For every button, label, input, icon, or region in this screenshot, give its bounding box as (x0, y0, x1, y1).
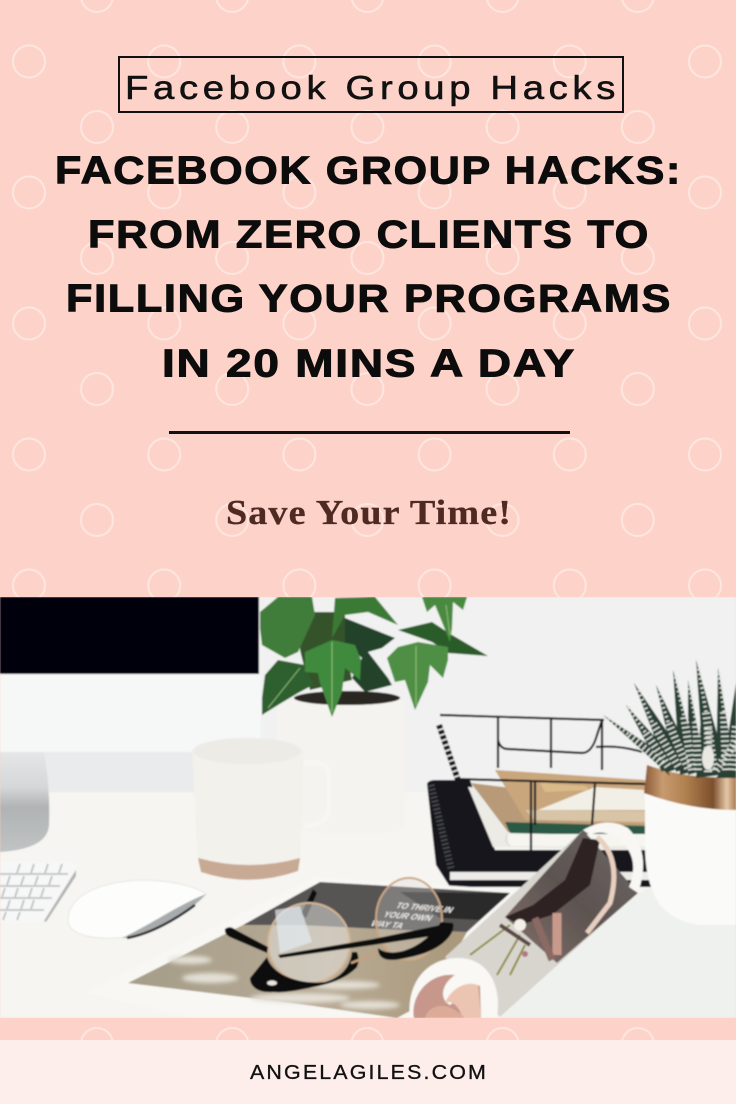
title: IN 20 MINS A DAY (162, 342, 576, 386)
keyboard (0, 862, 76, 922)
tagline: Save Your Time! (226, 493, 512, 532)
photo: desk scene (0, 597, 736, 1018)
divider line (169, 431, 570, 434)
wall and desk (0, 597, 736, 1018)
tag: boxed subtitle: Facebook Group Hacks (125, 69, 620, 106)
open magazine (128, 881, 510, 1018)
title: FILLING YOUR PROGRAMS (66, 278, 672, 320)
glasses (225, 878, 453, 992)
succulent (603, 660, 736, 778)
title: FROM ZERO CLIENTS TO (88, 214, 650, 256)
papers (468, 770, 646, 850)
title: FACEBOOK GROUP HACKS: (55, 150, 682, 192)
tag: boxed subtitle (119, 57, 623, 112)
wire basket (439, 715, 645, 852)
footer website: ANGELAGILES.COM (250, 1062, 488, 1084)
plant pot (277, 700, 405, 833)
magazine headline: WAY TA (369, 919, 406, 930)
notebook (427, 780, 655, 887)
footer band (0, 1040, 736, 1104)
monitor (0, 597, 261, 852)
magazine headline: YOUR OWN (381, 910, 435, 923)
magazine roll (409, 822, 643, 1018)
magazine headline (370, 902, 455, 930)
gold and white planter (644, 765, 736, 925)
mouse (68, 880, 206, 938)
plant (260, 597, 488, 717)
magazine headline: TO THRIVE IN (394, 901, 456, 915)
mug (192, 738, 300, 880)
title (55, 150, 682, 386)
